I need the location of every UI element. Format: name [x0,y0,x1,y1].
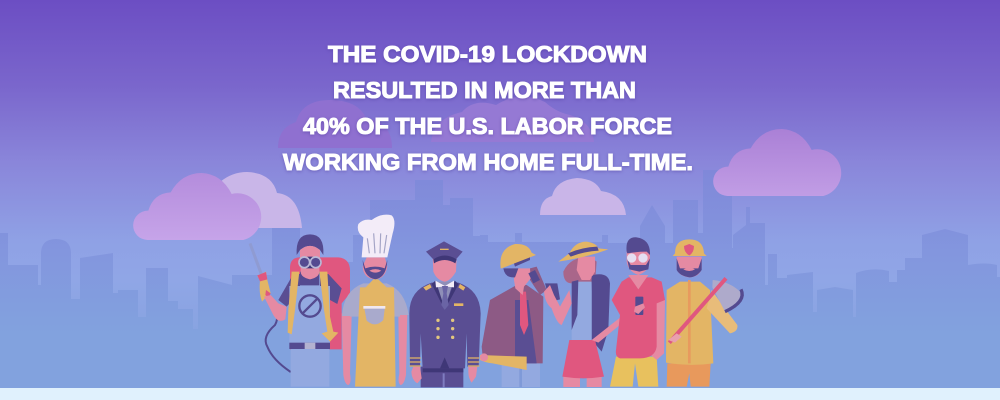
ground strip [0,388,1000,400]
worker: engineer with hard hat [480,244,547,387]
cloud: front left [133,173,261,240]
worker: chef [342,215,409,387]
worker: firefighter with axe [666,239,742,387]
headline [283,41,693,175]
worker: pest control sprayer [250,234,350,387]
worker: traveller with backpack [544,242,643,387]
headline: WORKING FROM HOME FULL-TIME. [283,149,693,175]
headline: RESULTED IN MORE THAN [333,77,636,103]
cloud: right [713,129,841,196]
headline: 40% OF THE U.S. LABOR FORCE [303,113,672,139]
cloud: back left [220,172,302,228]
worker: airline pilot [409,241,481,387]
worker: man with phone [610,237,665,387]
faint clouds behind headline [278,97,594,148]
workers group right [480,237,742,387]
headline: THE COVID-19 LOCKDOWN [328,41,647,67]
workers group left [250,215,481,387]
city skyline [0,170,1000,388]
cloud: small centre [540,178,626,215]
